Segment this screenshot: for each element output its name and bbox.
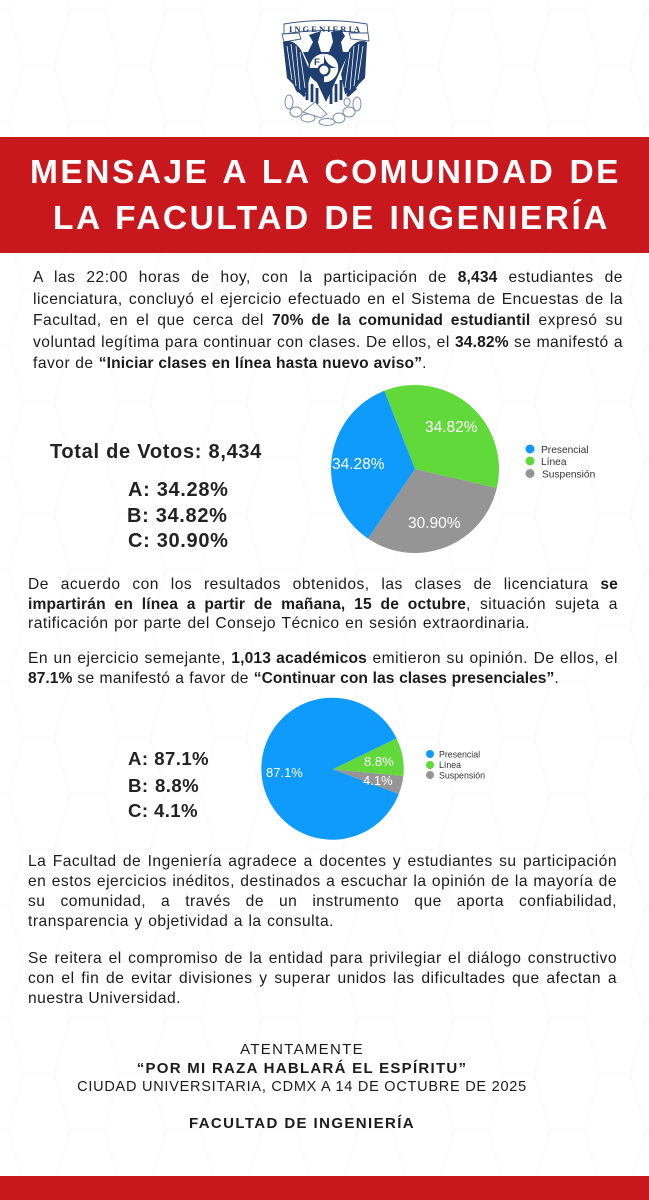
pie chart: students: 30.90% xyxy=(408,515,461,532)
text block: thanks: La Facultad de Ingeniería agradece a docentes y estudiantes su participación xyxy=(28,853,617,870)
results list: students xyxy=(127,479,229,552)
pie chart: academics: 4.1% xyxy=(363,773,393,788)
text block: intro: A las 22:00 horas de hoy, con la participación de 8,434 estudiantes de xyxy=(33,269,623,286)
text block: results: impartirán en línea a partir de mañana, 15 de octubre, situación sujeta a xyxy=(28,596,618,613)
title line 1: MENSAJE A LA COMUNIDAD DE xyxy=(30,154,621,191)
text block: academics: 87.1% se manifestó a favor de “Continuar con las clases presenciales”. xyxy=(28,670,559,687)
results list: students: A: 34.28% xyxy=(128,479,229,501)
text block: commitment: nuestra Universidad. xyxy=(28,990,181,1007)
icon: Facultad de Ingeniería crest xyxy=(282,20,370,126)
pie chart: academics: Línea xyxy=(439,760,461,770)
text block: thanks: en estos ejercicios inéditos, destinados a escuchar la opinión de la mayoría de xyxy=(28,873,617,890)
text block: intro: favor de “Iniciar clases en línea hasta nuevo aviso”. xyxy=(33,355,427,372)
text block: thanks: su comunidad, a través de un instrumento que aporta confiabilidad, xyxy=(28,893,617,910)
results list: students: C: 30.90% xyxy=(128,530,229,552)
pie chart: academics xyxy=(261,698,485,840)
signature block: ATENTAMENTE xyxy=(240,1041,364,1058)
signature block xyxy=(77,1041,527,1132)
pie chart: students: Presencial xyxy=(541,445,589,456)
pie chart: academics: Presencial xyxy=(439,750,480,760)
pie chart: students xyxy=(331,385,595,553)
icon: Facultad de Ingeniería crest: INGENIERIA xyxy=(289,24,362,34)
text block: academics xyxy=(28,650,618,687)
pie chart: students: 34.82% xyxy=(425,419,478,436)
text block: intro: Facultad, en el que cerca del 70% de la comunidad estudiantil expresó su xyxy=(33,312,623,329)
signature block: CIUDAD UNIVERSITARIA, CDMX A 14 DE OCTUBRE DE 2025 xyxy=(77,1079,527,1095)
results list: academics: C: 4.1% xyxy=(128,800,198,821)
text block: commitment: con el fin de evitar divisiones y superar unidos las dificultades que afectan a xyxy=(28,970,617,987)
text block: intro: licenciatura, concluyó el ejercicio efectuado en el Sistema de Encuestas de la xyxy=(33,291,623,308)
pie chart: students: 34.28% xyxy=(332,456,385,473)
results list: academics: B: 8.8% xyxy=(128,775,199,796)
signature block: “POR MI RAZA HABLARÁ EL ESPÍRITU” xyxy=(137,1060,467,1077)
title line 2: LA FACULTAD DE INGENIERÍA xyxy=(53,200,610,237)
text block: results xyxy=(28,576,618,632)
text block: academics: En un ejercicio semejante, 1,013 académicos emitieron su opinión. De ellos, el xyxy=(28,650,618,667)
footer band xyxy=(0,1176,649,1200)
pie chart: students: Suspensión xyxy=(542,470,595,480)
icon: Facultad de Ingeniería crest: I xyxy=(331,57,334,68)
results list: academics xyxy=(128,748,209,821)
pie chart: academics: 87.1% xyxy=(266,765,303,780)
pie chart: academics: Suspensión xyxy=(439,770,485,780)
text block: intro: voluntad legítima para continuar con clases. De ellos, el 34.82% se manifestó a xyxy=(33,334,623,351)
title banner xyxy=(0,137,649,253)
pie chart: students: Línea xyxy=(541,457,567,468)
results list: students: B: 34.82% xyxy=(127,505,228,527)
icon: Facultad de Ingeniería crest: F xyxy=(314,57,320,68)
text block: results: De acuerdo con los resultados obtenidos, las clases de licenciatura se xyxy=(28,576,618,593)
text block: thanks xyxy=(28,853,617,930)
text block: results: ratificación por parte del Consejo Técnico en sesión extraordinaria. xyxy=(28,615,530,632)
results list: academics: A: 87.1% xyxy=(128,748,209,769)
text block: commitment xyxy=(28,950,617,1007)
pie chart: academics: 8.8% xyxy=(364,754,394,769)
total votes heading: Total de Votos: 8,434 xyxy=(50,441,262,463)
text block: intro xyxy=(33,269,623,372)
text block: thanks: transparencia y objetividad a la consulta. xyxy=(28,913,334,930)
text block: commitment: Se reitera el compromiso de la entidad para privilegiar el diálogo constructivo xyxy=(28,950,617,967)
signature block: FACULTAD DE INGENIERÍA xyxy=(189,1115,415,1132)
